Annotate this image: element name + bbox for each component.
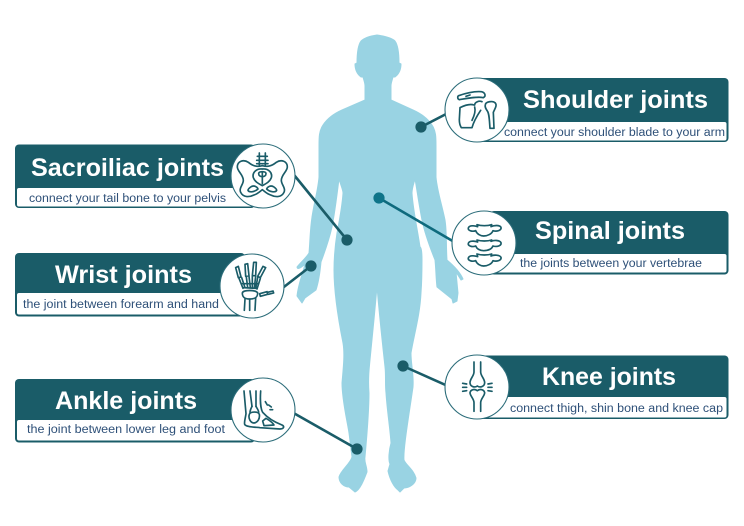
heading: knee joints: Knee joints	[542, 363, 676, 391]
text: wrist description: the joint between forearm and hand	[23, 299, 219, 311]
connector: wrist	[280, 260, 317, 290]
connector: sacroiliac	[290, 170, 353, 246]
panel: shoulder joints	[480, 78, 728, 142]
panel: sacroiliac joints	[15, 144, 255, 208]
text: knee description: connect thigh, shin bone and knee cap	[510, 403, 723, 415]
text: shoulder description: connect your shoulder blade to your arm	[504, 127, 725, 139]
heading: shoulder joints: Shoulder joints	[523, 86, 708, 114]
icon: vertebrae	[452, 211, 516, 275]
panel: ankle joints	[15, 379, 255, 442]
icon: hand and wrist bones	[220, 254, 284, 318]
connector: knee	[397, 360, 450, 387]
heading: ankle joints: Ankle joints	[55, 387, 197, 415]
text: ankle description: the joint between lower leg and foot	[27, 424, 226, 436]
icon: shoulder joint	[445, 78, 509, 142]
panel: knee joints	[480, 356, 728, 419]
icon: pelvis	[231, 144, 295, 208]
panel: wrist joints	[15, 253, 245, 316]
human body silhouette	[297, 35, 463, 492]
heading: wrist joints: Wrist joints	[55, 261, 192, 289]
text: spinal description: the joints between your vertebrae	[520, 258, 702, 270]
connector: spinal	[373, 192, 456, 243]
heading: sacroiliac joints: Sacroiliac joints	[31, 154, 224, 182]
icon: knee joint	[445, 355, 509, 419]
text: sacroiliac description: connect your tail bone to your pelvis	[29, 193, 226, 205]
heading: spinal joints: Spinal joints	[535, 217, 685, 245]
icon: ankle and foot bones	[231, 378, 295, 442]
connector: shoulder	[415, 112, 450, 133]
panel: spinal joints	[490, 211, 728, 274]
connector: ankle	[290, 411, 363, 455]
